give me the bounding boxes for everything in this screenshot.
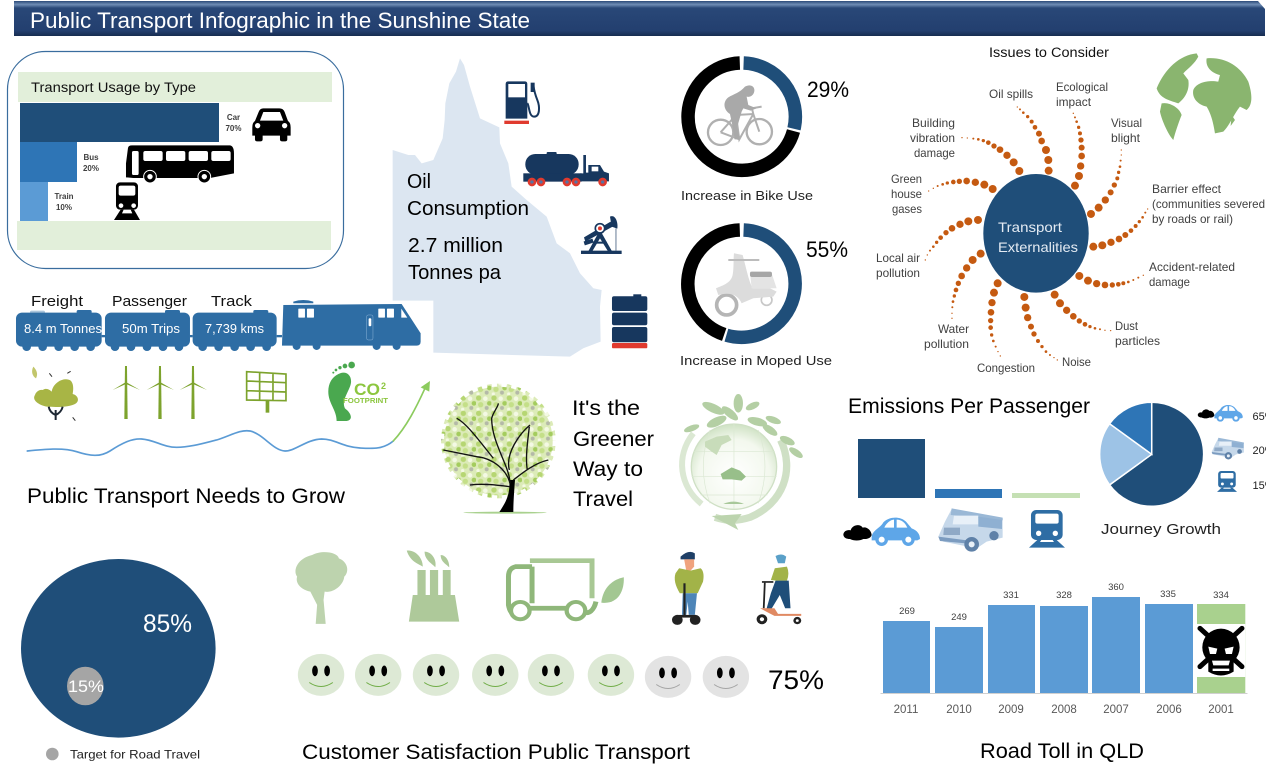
heading: customer satisfaction public transport: Customer Satisfaction Public Transport bbox=[302, 741, 690, 764]
labels: bar values: 10% bbox=[56, 203, 72, 212]
legend: bus 20% bbox=[1212, 438, 1266, 460]
axis line bbox=[880, 692, 1248, 694]
arm labels: Congestion bbox=[977, 361, 1035, 375]
icon: tanker truck bbox=[523, 152, 609, 186]
hub text: Externalities bbox=[998, 239, 1078, 255]
growth line with arrow bbox=[27, 381, 430, 455]
labels above the wagons: Track bbox=[211, 293, 253, 310]
value: 75%: 75% bbox=[768, 665, 824, 695]
panel: freight passenger track train bbox=[16, 293, 421, 351]
arm labels: particles bbox=[1115, 334, 1160, 348]
labels: bar values: Bus bbox=[83, 153, 99, 162]
legend: train 15% bbox=[1217, 471, 1266, 492]
panel: customer satisfaction smileys bbox=[298, 654, 824, 764]
arm labels: Visual bbox=[1111, 116, 1142, 130]
arm labels: impact bbox=[1056, 95, 1092, 109]
labels above the wagons: Freight bbox=[31, 293, 84, 310]
bars bbox=[883, 597, 1193, 693]
arm labels: gases bbox=[892, 202, 922, 216]
arm labels: Building bbox=[912, 116, 955, 130]
bar: car bbox=[20, 103, 219, 142]
map: Queensland oil consumption bbox=[393, 58, 602, 357]
icon: black car bbox=[252, 108, 291, 141]
arm labels: damage bbox=[1149, 275, 1190, 289]
heading: journey growth: Journey Growth bbox=[1101, 521, 1221, 538]
chart: road toll bars bbox=[880, 582, 1248, 763]
year labels bbox=[894, 704, 1234, 716]
value labels bbox=[899, 582, 1229, 623]
inner circle with 15% bbox=[67, 667, 104, 705]
icon: oil barrel bbox=[612, 294, 647, 348]
icon row: green transport icons bbox=[296, 550, 801, 625]
arm labels: house bbox=[891, 187, 922, 201]
icon: fuel pump bbox=[504, 81, 539, 124]
year labels: 2007 bbox=[1103, 704, 1129, 716]
labels: bar values: 20% bbox=[83, 164, 99, 173]
value labels: 328 bbox=[1056, 590, 1072, 601]
wagon values bbox=[24, 322, 264, 336]
icon: black bus bbox=[126, 145, 234, 183]
year labels: 2001 bbox=[1208, 704, 1234, 716]
icon: CO2 footprint: 2 bbox=[381, 381, 386, 391]
labels: bar values: Car bbox=[227, 113, 240, 122]
arm labels: blight bbox=[1111, 131, 1141, 145]
icon: wind turbines bbox=[113, 366, 207, 419]
centre hub bbox=[983, 174, 1089, 293]
wagon values: 7,739 kms bbox=[205, 322, 264, 336]
arm labels: Green bbox=[891, 172, 922, 186]
icon: skull and crossbones bbox=[1197, 624, 1245, 677]
heading: issues to consider: Issues to Consider bbox=[989, 45, 1110, 60]
chart: increase in bike use donut bbox=[681, 63, 849, 203]
icon: solar panel bbox=[247, 372, 286, 413]
value labels: 334 bbox=[1213, 590, 1229, 601]
inner circle with 15%: 15% bbox=[68, 677, 104, 696]
label: increase in bike use: Increase in Bike Use bbox=[681, 188, 813, 203]
icon: moped bbox=[716, 253, 777, 315]
icon: factory bbox=[407, 550, 459, 622]
icon: person on scooter bbox=[757, 554, 801, 624]
arm labels: pollution bbox=[876, 266, 920, 280]
text: oil consumption bbox=[407, 171, 529, 284]
labels above the wagons: Passenger bbox=[112, 293, 187, 310]
bar: train bbox=[20, 182, 48, 221]
title: Public Transport Infographic in the Sunshine State bbox=[30, 8, 530, 33]
icon: train bbox=[1029, 510, 1065, 548]
text: greener way to travel: It's the bbox=[572, 397, 640, 420]
arm labels: Local air bbox=[876, 251, 920, 265]
arm labels: (communities severed bbox=[1152, 197, 1265, 211]
chart: journey growth pie bbox=[1100, 402, 1266, 538]
text: greener way to travel: Way to bbox=[573, 458, 643, 481]
value labels: 249 bbox=[951, 612, 967, 623]
text: greener way to travel bbox=[572, 397, 654, 511]
hub text: Transport bbox=[998, 219, 1062, 235]
text: greener way to travel: Greener bbox=[573, 428, 654, 451]
arm labels: Accident-related bbox=[1149, 260, 1235, 274]
icon: person on segway bbox=[672, 552, 704, 625]
heading: emissions per passenger: Emissions Per Passenger bbox=[848, 395, 1090, 418]
wagon values: 8.4 m Tonnes bbox=[24, 322, 102, 336]
heading: transport usage: Transport Usage by Type bbox=[31, 80, 196, 95]
green smileys bbox=[298, 654, 634, 696]
icon: CO2 footprint: FOOTPRINT bbox=[343, 396, 388, 405]
arm labels: damage bbox=[914, 146, 955, 160]
icon: school bus bbox=[938, 508, 1003, 552]
icon: olive tree bbox=[32, 367, 78, 421]
bar: bus bbox=[20, 142, 77, 182]
bar: bus emissions bbox=[935, 489, 1002, 498]
label: increase in moped use: Increase in Moped Use bbox=[680, 353, 832, 368]
icon: pale tree bbox=[296, 552, 347, 624]
value labels: 335 bbox=[1160, 589, 1176, 600]
heading: road toll in QLD: Road Toll in QLD bbox=[980, 740, 1144, 763]
icon: CO2 footprint bbox=[328, 362, 388, 421]
bar: car emissions bbox=[858, 439, 925, 498]
arm labels: Dust bbox=[1115, 319, 1139, 333]
text: greener way to travel: Travel bbox=[573, 488, 633, 511]
arm labels: vibration bbox=[910, 131, 955, 145]
train wagons bbox=[16, 310, 282, 351]
grey smileys bbox=[645, 656, 749, 698]
panel: public transport needs to grow bbox=[27, 362, 430, 508]
text: oil consumption: Consumption bbox=[407, 198, 529, 220]
value labels: 360 bbox=[1108, 582, 1124, 593]
icon: green globe bbox=[682, 394, 804, 530]
value labels: 331 bbox=[1003, 590, 1019, 601]
text: oil consumption: Tonnes pa bbox=[408, 262, 502, 284]
labels: bar values: Train bbox=[54, 192, 74, 201]
hub text bbox=[998, 219, 1078, 255]
icon: black train bbox=[114, 182, 140, 220]
year labels: 2006 bbox=[1156, 704, 1182, 716]
train engine bbox=[282, 300, 421, 350]
icon: green world globe bbox=[1157, 53, 1251, 140]
icon: CO2 footprint: CO bbox=[354, 380, 380, 399]
chart: target for road travel bbox=[21, 559, 216, 762]
year labels: 2008 bbox=[1051, 704, 1077, 716]
arm labels: by roads or rail) bbox=[1152, 212, 1233, 226]
arm labels: Noise bbox=[1062, 355, 1091, 369]
icon: green tree bbox=[441, 384, 556, 514]
bar: train emissions bbox=[1012, 493, 1080, 498]
icon: green truck with leaf bbox=[508, 561, 624, 619]
bar 2001 green bbox=[1197, 604, 1245, 693]
text: oil consumption: Oil bbox=[407, 171, 431, 193]
panel: emissions per passenger bbox=[843, 395, 1090, 552]
value: 55%: 55% bbox=[806, 237, 848, 262]
year labels: 2009 bbox=[998, 704, 1024, 716]
icon: car with exhaust cloud bbox=[843, 518, 920, 546]
arm labels: Oil spills bbox=[989, 87, 1033, 101]
heading: public transport needs to grow: Public Transport Needs to Grow bbox=[27, 485, 346, 508]
arm labels: Barrier effect bbox=[1152, 182, 1222, 196]
labels: bar values bbox=[54, 113, 242, 212]
header banner bbox=[14, 1, 1265, 36]
dotted spiral arms bbox=[925, 106, 1148, 361]
value: 29%: 29% bbox=[807, 77, 849, 102]
legend: target for road travel: Target for Road Travel bbox=[70, 748, 200, 762]
panel: transport usage by type bbox=[8, 52, 344, 268]
arm labels: pollution bbox=[924, 337, 969, 351]
arm labels: Ecological bbox=[1056, 80, 1108, 94]
diagram: transport externalities bbox=[876, 80, 1265, 375]
arm labels: Water bbox=[938, 322, 969, 336]
legend: car 65% bbox=[1198, 405, 1266, 423]
icon: cyclist bbox=[708, 85, 772, 145]
arm labels bbox=[876, 80, 1265, 375]
text: oil consumption: 2.7 million bbox=[408, 235, 503, 257]
labels: bar values: 70% bbox=[225, 124, 242, 133]
year labels: 2011 bbox=[894, 704, 918, 716]
value: 85%: 85% bbox=[143, 610, 192, 638]
chart: increase in moped use donut bbox=[680, 230, 848, 368]
labels above the wagons bbox=[31, 293, 253, 310]
value labels: 269 bbox=[899, 606, 915, 617]
icon: oil pumpjack bbox=[581, 216, 622, 254]
year labels: 2010 bbox=[946, 704, 972, 716]
wagon values: 50m Trips bbox=[122, 322, 180, 336]
